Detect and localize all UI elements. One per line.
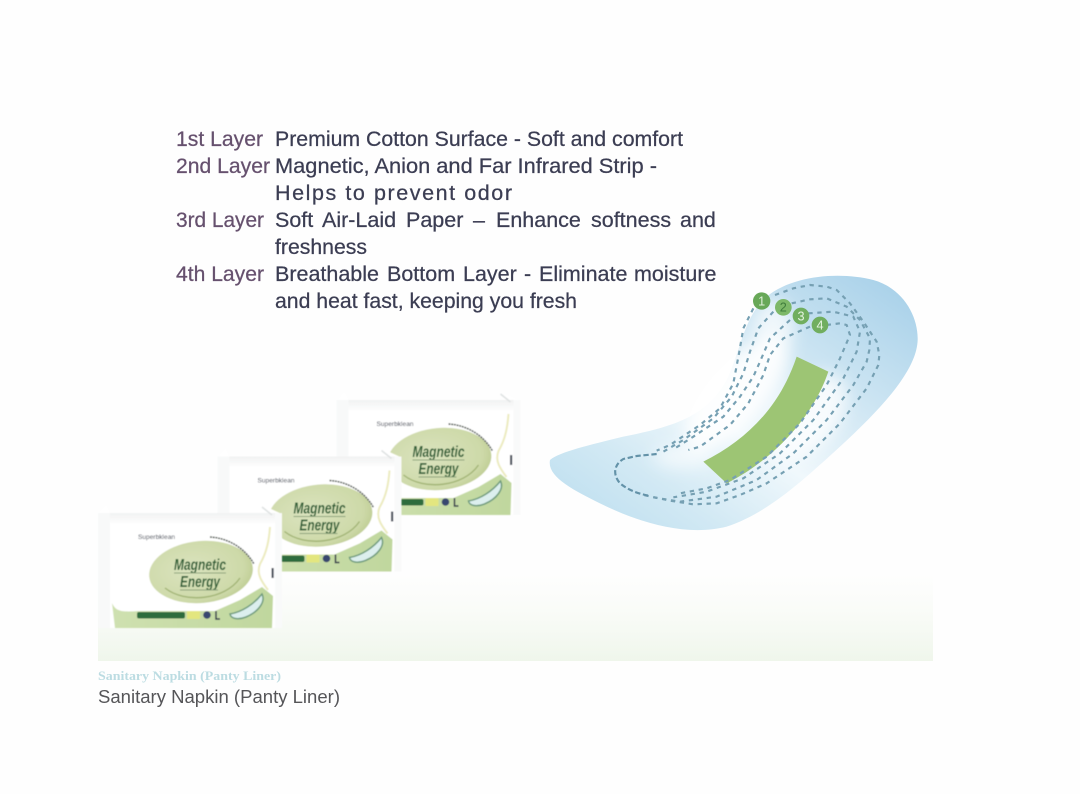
row: 2nd layer: Magnetic, Anion and Far Infrared Strip - xyxy=(275,154,657,178)
row: 3rd layer: Paper xyxy=(406,208,463,232)
product pack 1 (front) xyxy=(98,505,282,628)
numbered markers xyxy=(753,292,828,333)
marker 1: 1 xyxy=(758,294,765,308)
brand name: Superbklean xyxy=(138,534,175,541)
product pack 2 (middle) xyxy=(218,448,402,572)
row: 4th layer: Bottom xyxy=(387,262,455,286)
product pack 2 (middle): Magnetic xyxy=(294,500,346,518)
napkin body xyxy=(550,276,918,530)
row: 3rd layer: and xyxy=(680,208,716,232)
row: 3rd layer: freshness xyxy=(275,235,367,259)
product pack 2 (middle): Energy xyxy=(300,518,341,534)
layer description text xyxy=(176,127,716,313)
row: 4th layer: moisture xyxy=(634,262,716,286)
row: 3rd layer: Air-Laid xyxy=(322,208,396,232)
product pack 3 (back): Magnetic xyxy=(412,444,465,461)
row: 4th layer: 4th Layer xyxy=(176,262,264,286)
product pack 3 (back): Superbklean xyxy=(376,421,414,428)
row: 1st layer: Premium Cotton Surface - Soft and comfort xyxy=(275,127,683,151)
row: 3rd layer: 3rd Layer xyxy=(176,208,264,232)
green magnetic strip xyxy=(703,357,828,483)
row: 4th layer: and heat fast, keeping you fresh xyxy=(275,289,577,313)
mini napkin icon xyxy=(230,594,263,619)
row: 4th layer: Layer xyxy=(463,262,517,286)
marker 4: 4 xyxy=(816,318,824,332)
napkin highlights xyxy=(653,300,862,474)
product name xyxy=(174,557,226,591)
napkin layer diagram xyxy=(550,276,918,530)
row: 3rd layer xyxy=(176,208,716,259)
main caption: Sanitary Napkin (Panty Liner) xyxy=(98,686,340,707)
product name: Magnetic xyxy=(174,557,226,574)
faint serif caption: Sanitary Napkin (Panty Liner) xyxy=(98,669,281,683)
row: 3rd layer: Enhance xyxy=(496,208,581,232)
marker 2: 2 xyxy=(780,301,787,315)
product pack 3 (back): Energy xyxy=(418,461,460,478)
floor gradient band xyxy=(98,572,933,661)
row: 4th layer: Breathable xyxy=(275,262,379,286)
product pack 3 (back) xyxy=(336,392,520,515)
row: 4th layer: - xyxy=(524,262,531,286)
dashed layer outlines xyxy=(615,285,879,504)
product pack 2 (middle): Superbklean xyxy=(258,478,295,484)
row: 1st layer: 1st Layer xyxy=(176,127,263,151)
yellow wave line xyxy=(259,527,270,590)
row: 2nd layer: Helps to prevent odor xyxy=(275,181,512,205)
pack body xyxy=(98,505,282,628)
green base band xyxy=(112,587,273,628)
row: 2nd layer: 2nd Layer xyxy=(176,154,270,178)
marker 3: 3 xyxy=(797,309,805,323)
product name: Energy xyxy=(180,574,221,591)
row: 4th layer xyxy=(176,262,716,313)
row: 2nd layer xyxy=(176,154,657,205)
row: 3rd layer: softness xyxy=(591,208,671,232)
row: 3rd layer: Soft xyxy=(275,208,313,232)
green oval badge xyxy=(146,537,256,607)
row: 4th layer: Eliminate xyxy=(539,262,627,286)
row: 3rd layer: – xyxy=(473,208,485,232)
tiny curved tagline xyxy=(210,537,254,564)
pack icons xyxy=(137,611,220,619)
